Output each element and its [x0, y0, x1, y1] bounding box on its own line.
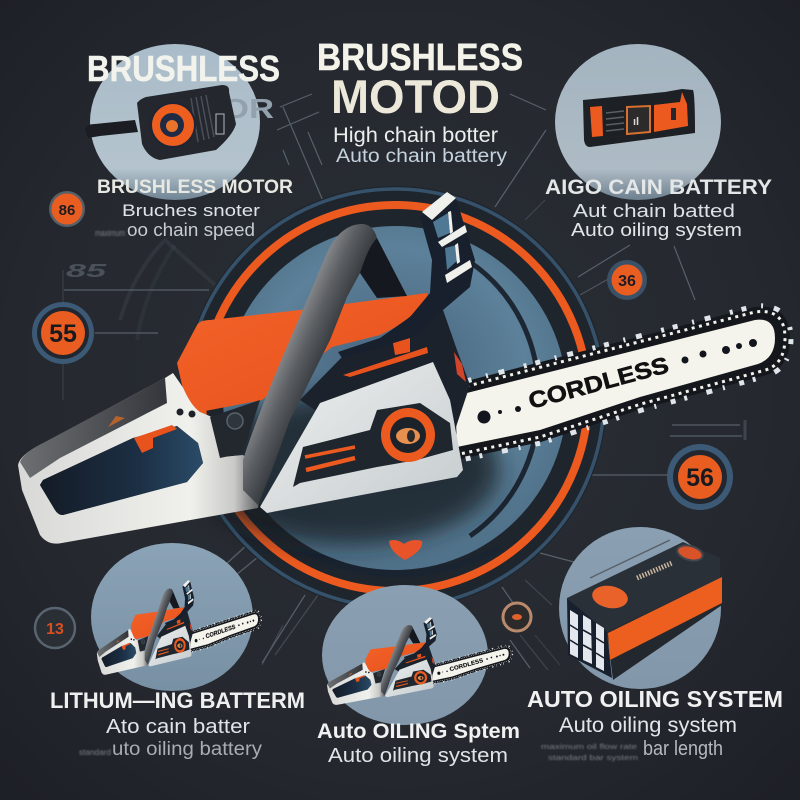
- decorative callout lines: [63, 94, 745, 670]
- trigger: [134, 425, 177, 453]
- bar length text: bar length: [643, 738, 723, 760]
- white front cover: [260, 362, 463, 513]
- circle: [90, 44, 260, 200]
- engine dark section: [300, 300, 470, 430]
- top handle black section: [360, 226, 407, 298]
- icon: mini chainsaw: [327, 617, 513, 705]
- icon: mini chainsaw: [97, 580, 261, 675]
- rear handle orange smudge: [108, 416, 125, 427]
- faded number: 85: [66, 261, 108, 281]
- body text line 1: Ato cain batter: [106, 716, 250, 738]
- wrap handle grip: [243, 224, 377, 505]
- orange heart marker on dial: [389, 540, 422, 560]
- orange body: [177, 293, 427, 412]
- circle: [91, 543, 253, 691]
- panel: chain battery: [545, 44, 772, 240]
- guide bar: [455, 320, 775, 447]
- subheading: AIGO CAIN BATTERY: [545, 176, 772, 199]
- circle: [555, 44, 721, 200]
- sprocket cover ring: [381, 408, 435, 462]
- body text line 2: Auto oiling system: [571, 220, 742, 240]
- cover stripes: [305, 447, 355, 470]
- badge: 13: 13: [46, 621, 64, 638]
- title: [317, 37, 523, 167]
- cover recess: [293, 403, 453, 487]
- orange engine stripes: [343, 338, 428, 377]
- body text: Auto oiling system: [328, 745, 508, 767]
- hand guard: [338, 192, 475, 358]
- badge: oil port: [503, 603, 531, 631]
- body text line 2: uto oiling battery: [112, 739, 263, 760]
- vents: [176, 408, 196, 418]
- engine red accent: [454, 352, 466, 382]
- subheading: BRUSHLESS MOTOR: [97, 177, 293, 198]
- panel: auto oiling centre: [317, 585, 520, 767]
- circle: [559, 527, 721, 689]
- fine print: [541, 744, 638, 762]
- badge: 56: [667, 444, 733, 510]
- title: MOTOD: [331, 70, 500, 123]
- icon: motor: [85, 85, 236, 160]
- badge: 36: 36: [618, 273, 636, 290]
- fine print: standard bar system: [548, 755, 638, 762]
- icon: battery: ıl: [633, 116, 639, 128]
- panel: auto oiling system: [527, 527, 783, 762]
- fine print prefix: maximum: [95, 228, 125, 238]
- badge: 36: [607, 260, 647, 300]
- guide bar holes: [478, 339, 757, 424]
- panel: lithium battery: [50, 543, 305, 760]
- body text line 2: oo chain speed: [127, 220, 255, 240]
- title: High chain botter: [333, 124, 498, 147]
- title: BRUSHLESS: [317, 37, 523, 79]
- subheading: AUTO OILING SYSTEM: [527, 686, 783, 712]
- chain: [452, 306, 791, 461]
- badge: 86: 86: [59, 202, 75, 219]
- handle opening: [40, 426, 203, 515]
- badge: 56: 56: [686, 464, 714, 492]
- fine print prefix: standard: [79, 748, 111, 757]
- heading: BRUSHLESS: [87, 48, 280, 89]
- main chainsaw: [18, 192, 791, 544]
- circle: [322, 585, 488, 725]
- body text line 1: Bruches snoter: [122, 201, 260, 220]
- dark control panel: [210, 400, 260, 458]
- body text line 1: Aut chain batted: [573, 201, 735, 221]
- icon: battery: [583, 89, 695, 147]
- central circular dial: [183, 186, 607, 610]
- icon: large battery: [567, 540, 722, 680]
- panel button: [227, 413, 243, 429]
- rear handle grey top: [20, 378, 167, 478]
- body text line 1: Auto oiling system: [559, 714, 737, 737]
- badge: 86: [49, 191, 85, 227]
- title: Auto chain battery: [336, 146, 508, 167]
- panel: brushless motor: [85, 44, 293, 240]
- badge: 13: [35, 608, 75, 648]
- cordless label: CORDLESS: [526, 351, 671, 414]
- rear handle: [18, 373, 264, 544]
- fine print: maximum oil flow rate: [541, 744, 637, 751]
- faded OR text: OR: [222, 93, 274, 124]
- badge: 55: [32, 302, 94, 364]
- subheading: LITHUM—ING BATTERM: [50, 688, 305, 713]
- subheading: Auto OILING Sptem: [317, 720, 520, 743]
- badge: 55: 55: [49, 320, 77, 348]
